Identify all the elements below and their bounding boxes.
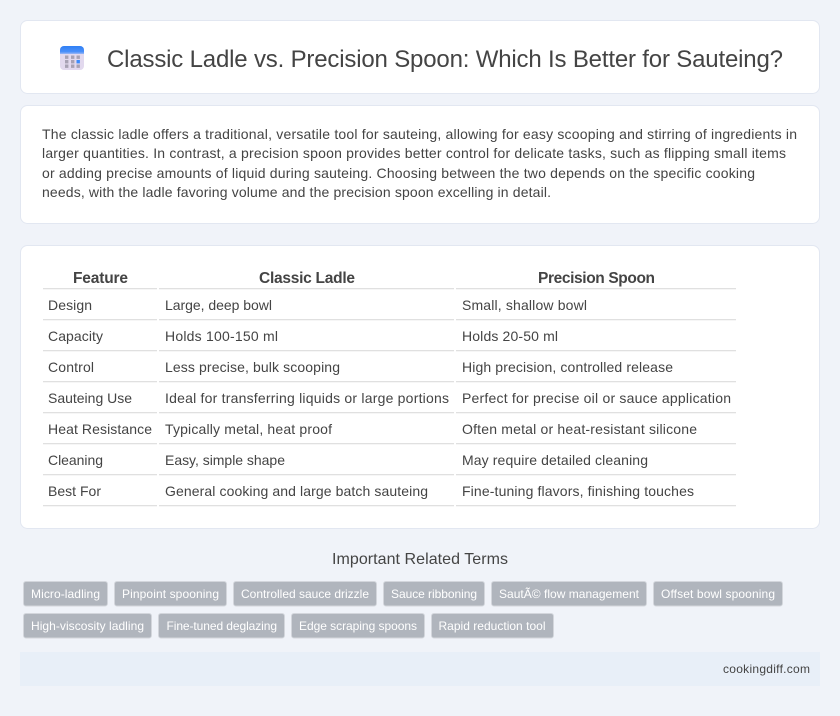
row: cleaning: Cleaning	[48, 452, 103, 468]
tags: related terms: Pinpoint spooning	[122, 587, 219, 601]
row: cleaning	[48, 452, 648, 468]
table header row: Feature	[73, 270, 128, 287]
intro text block	[42, 126, 797, 200]
row: design: Large, deep bowl	[165, 297, 272, 313]
row: sauteing use	[48, 390, 731, 406]
title: Classic Ladle vs. Precision Spoon: Which Is Better for Sauteing?	[107, 46, 783, 73]
row: control: Control	[48, 359, 94, 375]
row: sauteing use: Ideal for transferring liquids or large portions	[165, 390, 449, 406]
tags: related terms: Edge scraping spoons	[299, 619, 417, 633]
row: design: Design	[48, 297, 92, 313]
row: heat resistance: Heat Resistance	[48, 421, 152, 437]
tags: related terms	[24, 582, 782, 638]
row: design	[48, 297, 587, 313]
row: best for	[48, 483, 694, 499]
intro text block: larger quantities. In contrast, a precision spoon provides better control for delicate tasks, such as flipping small items	[42, 145, 786, 161]
row: control: High precision, controlled release	[462, 359, 673, 375]
row: best for: General cooking and large batch sauteing	[165, 483, 428, 499]
row: best for: Best For	[48, 483, 101, 499]
intro text block: The classic ladle offers a traditional, versatile tool for sauteing, allowing for easy scooping and stirring of ingredients in	[42, 126, 797, 142]
row: cleaning: May require detailed cleaning	[462, 452, 648, 468]
row: sauteing use: Perfect for precise oil or sauce application	[462, 390, 731, 406]
row: heat resistance: Often metal or heat-resistant silicone	[462, 421, 697, 437]
intro text block: or adding precise amounts of liquid during sauteing. Choosing between the two depends on the specific cooking	[42, 165, 755, 181]
tags: related terms: Sauce ribboning	[391, 587, 477, 601]
tags: related terms: SautÃ© flow management	[499, 587, 640, 601]
row: design: Small, shallow bowl	[462, 297, 587, 313]
header panel	[20, 20, 820, 94]
row: capacity: Holds 100-150 ml	[165, 328, 278, 344]
row: heat resistance: Typically metal, heat proof	[165, 421, 332, 437]
table header row: Classic Ladle	[259, 270, 355, 287]
row: best for: Fine-tuning flavors, finishing touches	[462, 483, 694, 499]
row: sauteing use: Sauteing Use	[48, 390, 132, 406]
panel: introduction	[20, 106, 820, 224]
row: capacity: Capacity	[48, 328, 103, 344]
row: heat resistance	[48, 421, 697, 437]
footer	[20, 652, 820, 686]
heading: related terms: Important Related Terms	[332, 551, 508, 568]
intro text block: needs, with the ladle favoring volume and the precision spoon excelling in detail.	[42, 184, 551, 200]
tags: related terms: Rapid reduction tool	[438, 619, 546, 633]
table header row: Precision Spoon	[538, 270, 655, 287]
tags: related terms: Offset bowl spooning	[661, 587, 775, 601]
tags: related terms: Controlled sauce drizzle	[241, 587, 369, 601]
row: cleaning: Easy, simple shape	[165, 452, 285, 468]
row: capacity	[48, 328, 558, 344]
tags: related terms: Micro-ladling	[31, 587, 100, 601]
table header row	[73, 270, 655, 287]
tags: related terms: High-viscosity ladling	[31, 619, 144, 633]
row: capacity: Holds 20-50 ml	[462, 328, 558, 344]
tags: related terms: Fine-tuned deglazing	[166, 619, 277, 633]
footer: cookingdiff.com	[723, 662, 810, 676]
icon: calendar	[60, 46, 84, 70]
row: control: Less precise, bulk scooping	[165, 359, 340, 375]
panel: comparison table	[20, 246, 820, 528]
row: control	[48, 359, 673, 375]
